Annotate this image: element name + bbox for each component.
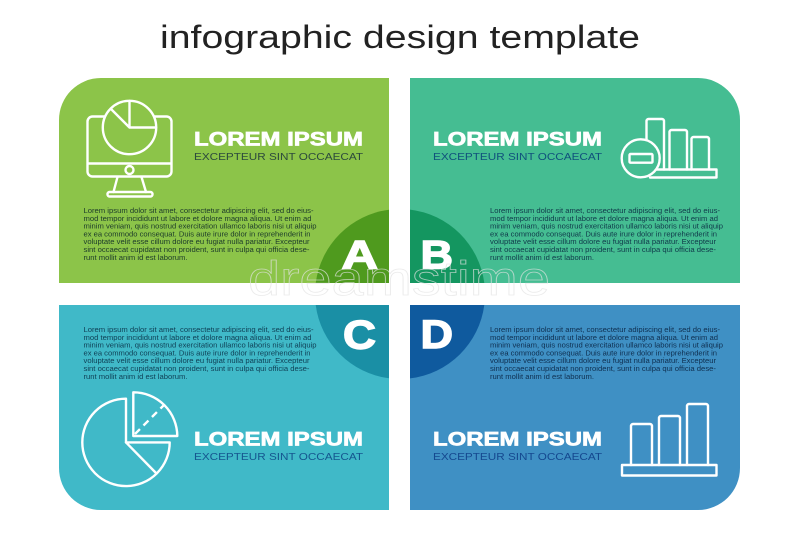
panel: B — [410, 78, 740, 283]
panel: A — [59, 78, 389, 283]
heading C: LOREM IPSUM — [194, 428, 363, 450]
body text A — [84, 208, 317, 262]
body text B: sint occaecat cupidatat non proident, sunt in culpa qui officia dese- — [490, 247, 716, 254]
badge A — [316, 210, 389, 283]
subheading A: EXCEPTEUR SINT OCCAECAT — [194, 152, 363, 163]
body text B: mod tempor incididunt ut labore et dolore magna aliqua. Ut enim ad — [490, 216, 718, 223]
subheading D: EXCEPTEUR SINT OCCAECAT — [433, 452, 602, 463]
icon: monitor with pie chart — [88, 101, 172, 196]
body text C: sint occaecat cupidatat non proident, sunt in culpa qui officia dese- — [84, 366, 310, 373]
body text C: minim veniam, quis nostrud exercitation ullamco laboris nisi ut aliquip — [84, 343, 317, 350]
body text C: voluptate velit esse cillum dolore eu fugiat nulla pariatur. Excepteur — [84, 358, 310, 365]
body text C: runt mollit anim id est laborum. — [84, 374, 188, 381]
badge A: A — [342, 234, 378, 278]
badge D — [410, 305, 484, 378]
body text D — [490, 327, 723, 381]
heading D: LOREM IPSUM — [433, 428, 602, 450]
icon: bar chart — [622, 404, 716, 476]
body text B: ex ea commodo consequat. Duis aute irure dolor in reprehenderit in — [490, 231, 717, 238]
body text C: ex ea commodo consequat. Duis aute irure dolor in reprehenderit in — [84, 350, 311, 357]
body text A: voluptate velit esse cillum dolore eu fugiat nulla pariatur. Excepteur — [84, 239, 310, 246]
body text A: runt mollit anim id est laborum. — [84, 255, 188, 262]
watermark: dreamstime — [248, 253, 550, 306]
panel B background — [410, 78, 740, 283]
badge B: B — [420, 234, 453, 278]
heading A: LOREM IPSUM — [194, 128, 363, 150]
body text C — [84, 327, 317, 381]
body text B: minim veniam, quis nostrud exercitation ullamco laboris nisi ut aliquip — [490, 224, 723, 231]
subheading B: EXCEPTEUR SINT OCCAECAT — [433, 152, 602, 163]
badge C: C — [343, 314, 376, 358]
body text D: minim veniam, quis nostrud exercitation ullamco laboris nisi ut aliquip — [490, 343, 723, 350]
body text A: ex ea commodo consequat. Duis aute irure dolor in reprehenderit in — [84, 231, 311, 238]
body text B: voluptate velit esse cillum dolore eu fugiat nulla pariatur. Excepteur — [490, 239, 717, 246]
icon: bar chart with minus — [622, 119, 716, 178]
badge C — [316, 305, 389, 378]
body text A: minim veniam, quis nostrud exercitation ullamco laboris nisi ut aliquip — [84, 224, 317, 231]
body text D: runt mollit anim id est laborum. — [490, 374, 594, 381]
body text D: sint occaecat cupidatat non proident, sunt in culpa qui officia dese- — [490, 366, 716, 373]
panel: D — [410, 305, 740, 510]
body text B: Lorem ipsum dolor sit amet, consectetur adipiscing elit, sed do eius- — [490, 208, 720, 215]
icon: pie chart with detached slice — [82, 392, 177, 486]
heading B: LOREM IPSUM — [433, 128, 602, 150]
badge D: D — [420, 313, 453, 357]
badge B — [410, 210, 484, 283]
body text C: Lorem ipsum dolor sit amet, consectetur adipiscing elit, sed do eius- — [84, 327, 314, 334]
body text A: sint occaecat cupidatat non proident, sunt in culpa qui officia dese- — [84, 247, 310, 254]
body text D: voluptate velit esse cillum dolore eu fugiat nulla pariatur. Excepteur — [490, 358, 717, 365]
panel A background — [59, 78, 389, 283]
body text A: Lorem ipsum dolor sit amet, consectetur adipiscing elit, sed do eius- — [84, 208, 314, 215]
body text D: mod tempor incididunt ut labore et dolore magna aliqua. Ut enim ad — [490, 335, 718, 342]
body text B — [490, 208, 723, 262]
body text A: mod tempor incididunt ut labore et dolore magna aliqua. Ut enim ad — [84, 216, 312, 223]
body text D: Lorem ipsum dolor sit amet, consectetur adipiscing elit, sed do eius- — [490, 327, 720, 334]
panel D background — [410, 305, 740, 510]
panel C background — [59, 305, 389, 510]
subheading C: EXCEPTEUR SINT OCCAECAT — [194, 452, 363, 463]
body text D: ex ea commodo consequat. Duis aute irure dolor in reprehenderit in — [490, 350, 717, 357]
body text B: runt mollit anim id est laborum. — [490, 255, 594, 262]
body text C: mod tempor incididunt ut labore et dolore magna aliqua. Ut enim ad — [84, 335, 312, 342]
title: infographic design template — [160, 19, 640, 55]
panel: C — [59, 305, 389, 510]
